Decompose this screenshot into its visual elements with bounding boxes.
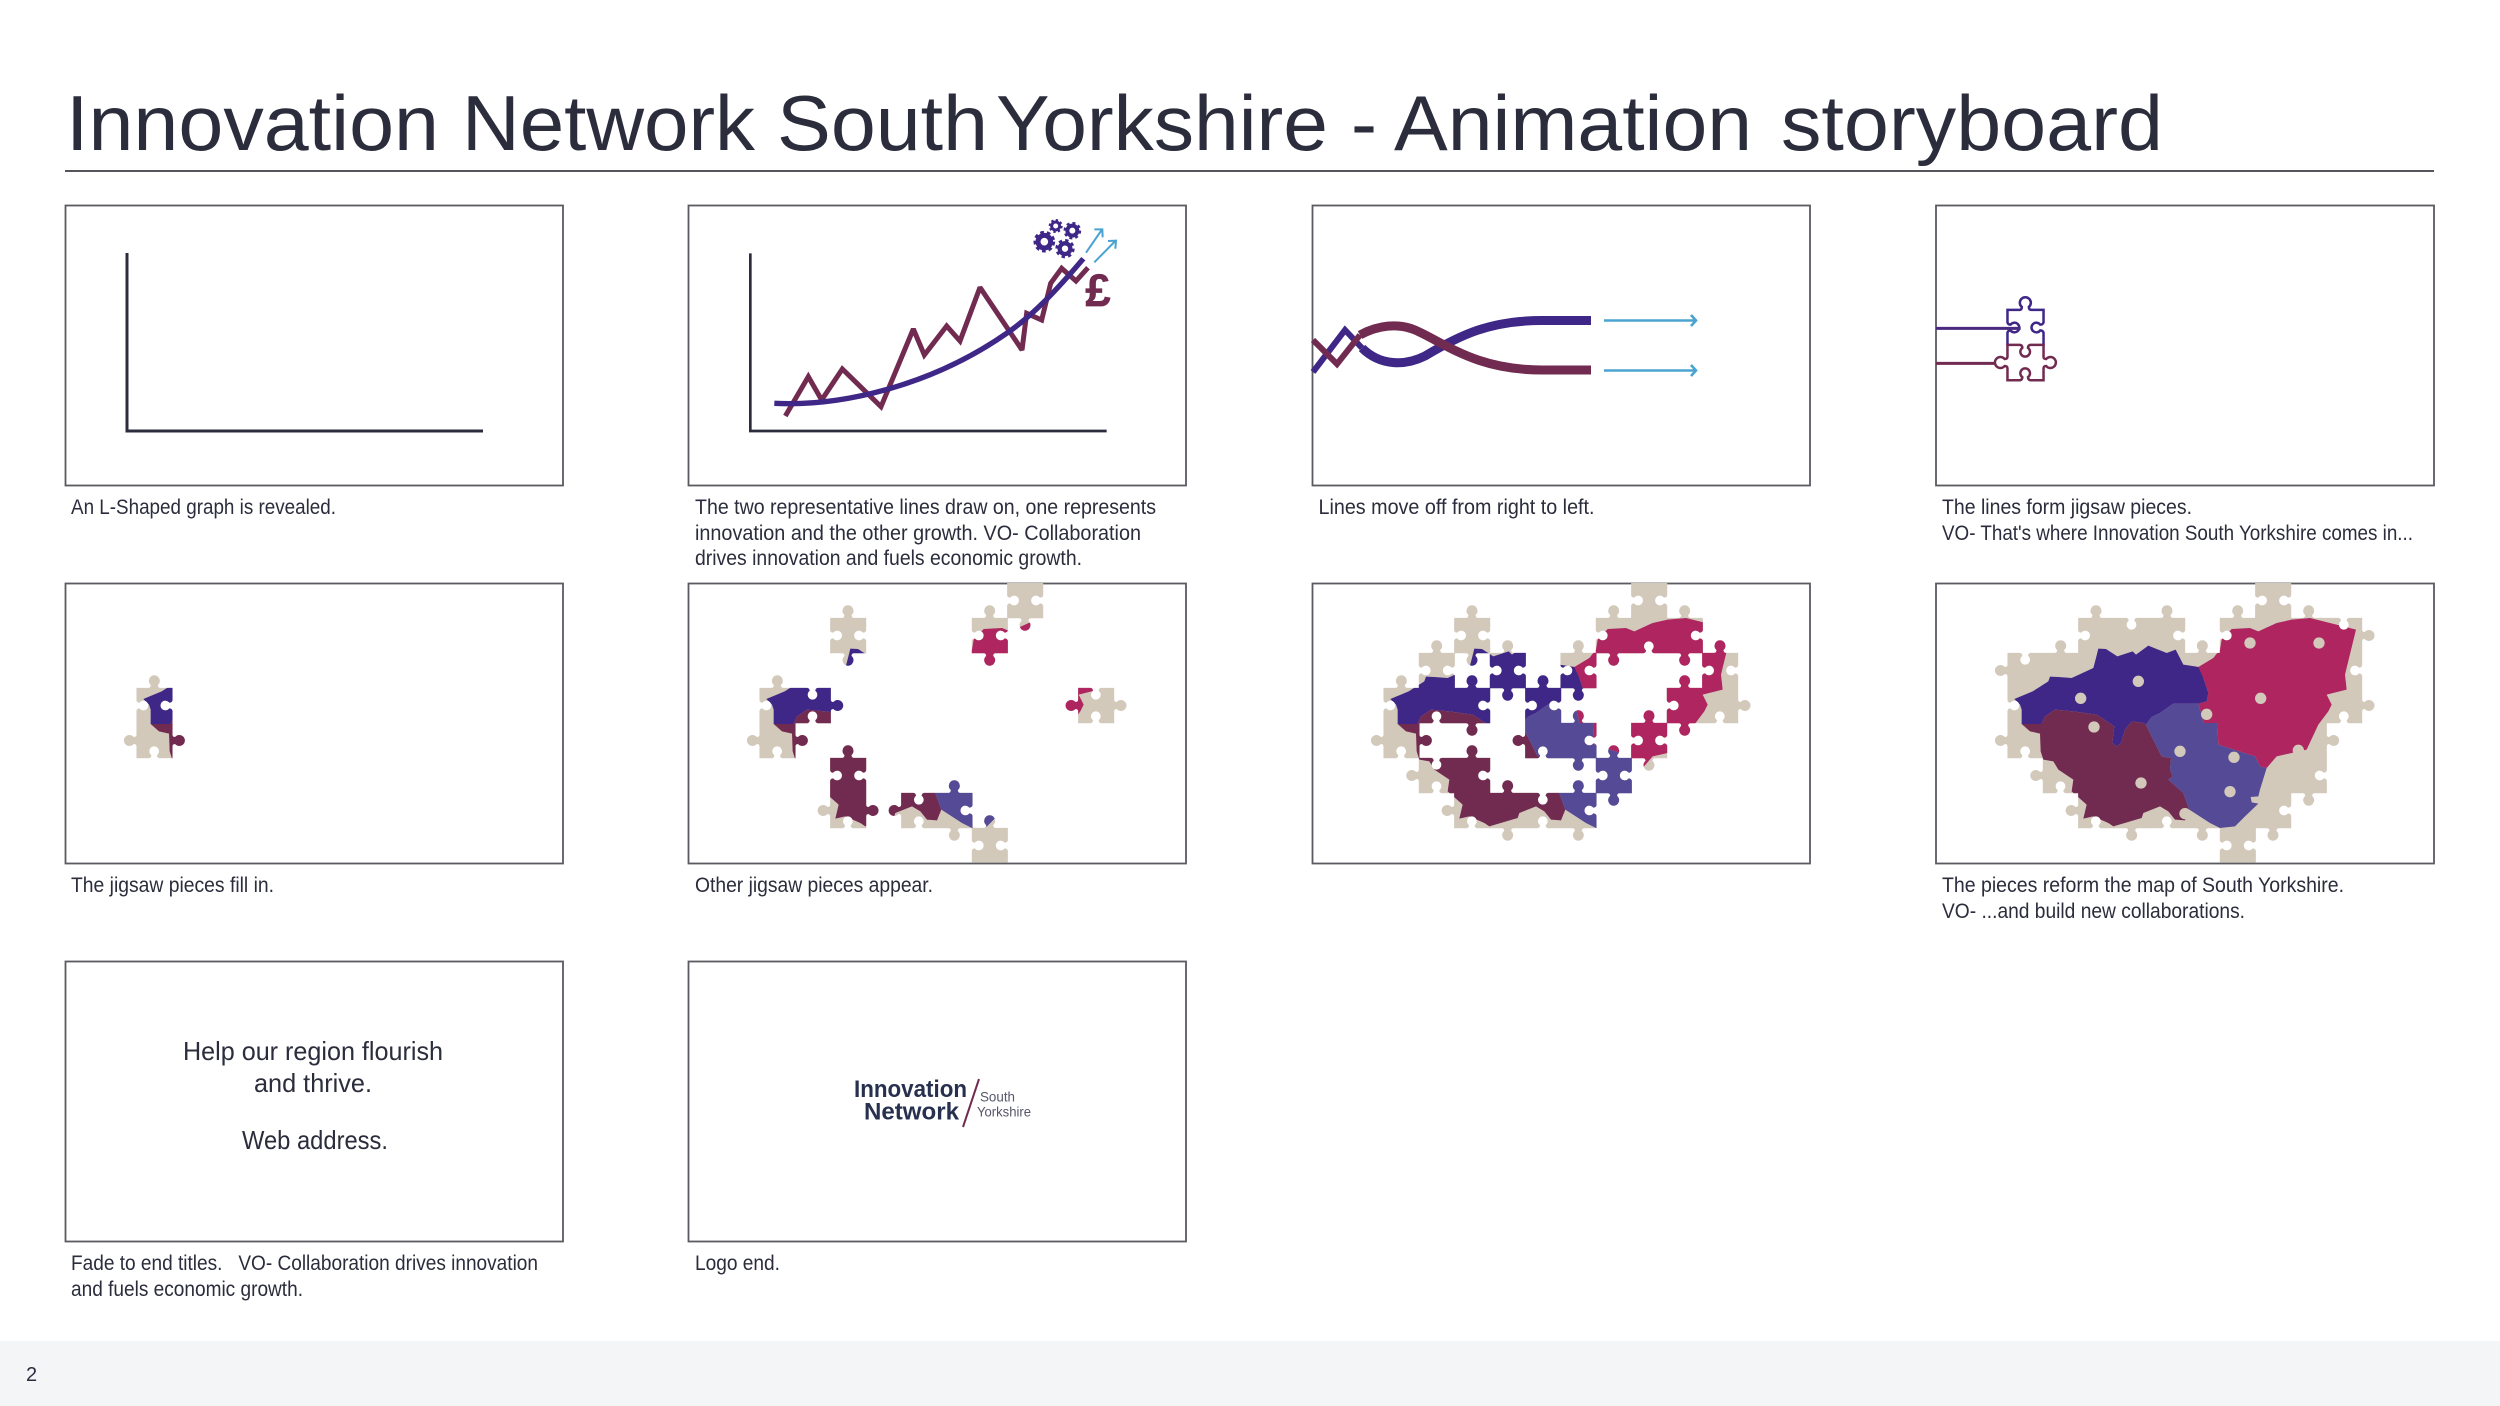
logo: Innovation Network South Yorkshire: Innovation xyxy=(854,1076,967,1103)
caption: lines form jigsaw pieces: The lines form jigsaw pieces. xyxy=(1942,495,2192,519)
panel: map outline of jigsaw pieces xyxy=(1312,582,1811,864)
caption: end titles xyxy=(71,1251,538,1301)
page number: 2 xyxy=(26,1364,37,1386)
chart: interweaving lines xyxy=(1313,320,1591,372)
panel: end titles xyxy=(66,962,563,1301)
icon: outlined jigsaw pieces xyxy=(1936,297,2056,380)
footer bar xyxy=(0,1341,2500,1406)
caption: representative lines xyxy=(695,495,1156,570)
caption: logo end: Logo end. xyxy=(695,1251,780,1275)
title: Yorkshire xyxy=(996,79,1328,167)
caption: L-shaped graph: An L-Shaped graph is revealed. xyxy=(71,495,336,519)
title: South xyxy=(777,79,988,167)
title: Animation xyxy=(1394,79,1752,167)
icon: scattered jigsaw pieces xyxy=(747,583,1126,862)
caption: map of South Yorkshire: The pieces reform the map of South Yorkshire. xyxy=(1942,873,2344,897)
panel: logo end xyxy=(688,962,1186,1275)
caption: representative lines: innovation and the other growth. VO- Collaboration xyxy=(695,521,1141,545)
caption: end titles: Fade to end titles. VO- Collaboration drives innovation xyxy=(71,1251,538,1275)
icon: ring of jigsaw pieces xyxy=(1371,583,1750,841)
logo: Innovation Network South Yorkshire: Network xyxy=(864,1098,960,1126)
caption: map of South Yorkshire: VO- ...and build new collaborations. xyxy=(1942,899,2245,923)
icon: first jigsaw pieces xyxy=(124,675,185,758)
caption: representative lines: The two representative lines draw on, one represents xyxy=(695,495,1156,519)
title: Network xyxy=(462,79,756,167)
chart: empty L-shaped axes xyxy=(127,253,483,431)
title: - xyxy=(1351,79,1377,167)
caption: lines form jigsaw pieces xyxy=(1942,495,2413,545)
text: end title message: Help our region flourish xyxy=(183,1036,443,1066)
text: end title message xyxy=(183,1036,443,1155)
chart: innovation and growth lines xyxy=(750,220,1116,431)
arrows: pointing right xyxy=(1604,315,1696,376)
title: storyboard xyxy=(1781,79,2163,167)
panel: representative lines xyxy=(688,206,1186,570)
logo: Innovation Network South Yorkshire: South xyxy=(980,1089,1015,1105)
icon: pound sign: £ xyxy=(1085,265,1111,316)
caption: end titles: and fuels economic growth. xyxy=(71,1277,303,1301)
panel: L-shaped graph xyxy=(66,206,563,519)
title: Innovation xyxy=(66,79,439,167)
title xyxy=(66,79,2163,167)
panel: map of South Yorkshire xyxy=(1930,580,2463,923)
caption: map of South Yorkshire xyxy=(1942,873,2344,923)
caption: lines move off: Lines move off from right to left. xyxy=(1318,495,1594,519)
caption: jigsaw pieces fill in: The jigsaw pieces fill in. xyxy=(71,873,274,897)
logo: Innovation Network South Yorkshire xyxy=(854,1076,1031,1127)
panel: other jigsaw pieces appear xyxy=(682,580,1215,897)
panel: lines move off xyxy=(1312,206,1810,519)
icon: blue up arrows xyxy=(1086,229,1116,262)
map: South Yorkshire jigsaw xyxy=(1995,583,2374,862)
map location dots xyxy=(2075,637,2325,819)
text: end title message: and thrive. xyxy=(254,1068,372,1098)
logo: Innovation Network South Yorkshire: Yorkshire xyxy=(977,1104,1031,1120)
panel: jigsaw pieces fill in xyxy=(59,580,592,897)
panel: lines form jigsaw pieces xyxy=(1936,206,2434,545)
caption: other jigsaw pieces: Other jigsaw pieces appear. xyxy=(695,873,933,897)
icon: gears xyxy=(1035,220,1080,257)
caption: representative lines: drives innovation and fuels economic growth. xyxy=(695,546,1082,570)
caption: lines form jigsaw pieces: VO- That's where Innovation South Yorkshire comes in... xyxy=(1942,521,2413,545)
text: end title message: Web address. xyxy=(242,1125,388,1155)
